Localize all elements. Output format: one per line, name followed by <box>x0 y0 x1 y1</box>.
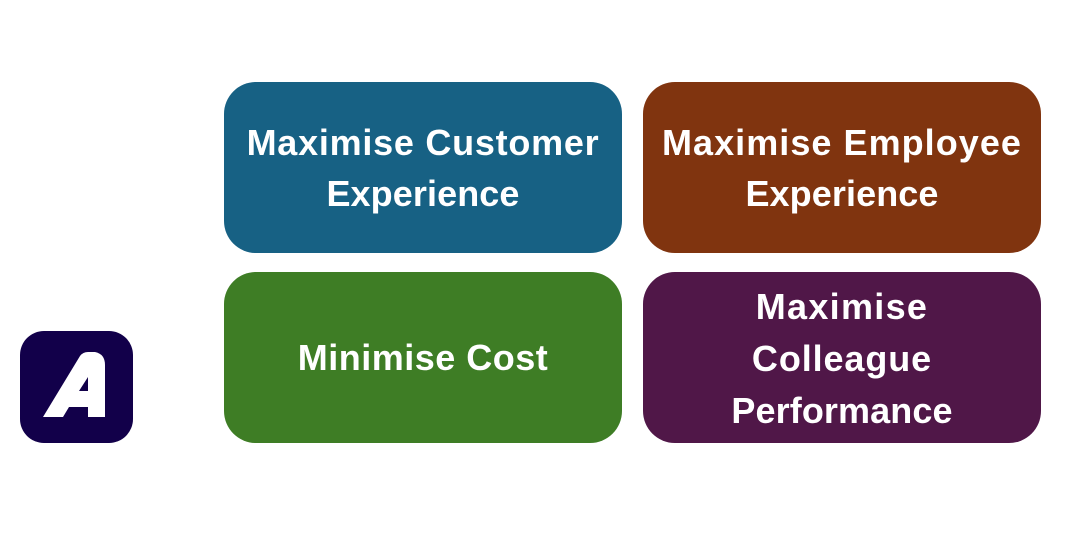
panel: maximise employee experience <box>643 82 1041 253</box>
heading: experience: Experience <box>326 173 520 214</box>
heading: experience: Experience <box>745 173 939 214</box>
panel: maximise colleague performance <box>643 272 1041 443</box>
panel: maximise customer experience <box>224 82 622 253</box>
heading: colleague: Colleague <box>752 338 932 379</box>
heading: performance: Performance <box>731 390 953 431</box>
heading: maximise: Maximise <box>756 286 928 327</box>
logo icon <box>20 331 133 443</box>
heading: customer: Maximise Customer <box>247 122 599 163</box>
heading: employee: Maximise Employee <box>662 122 1022 163</box>
heading: minimise cost: Minimise Cost <box>298 337 548 378</box>
panel: minimise cost <box>224 272 622 443</box>
